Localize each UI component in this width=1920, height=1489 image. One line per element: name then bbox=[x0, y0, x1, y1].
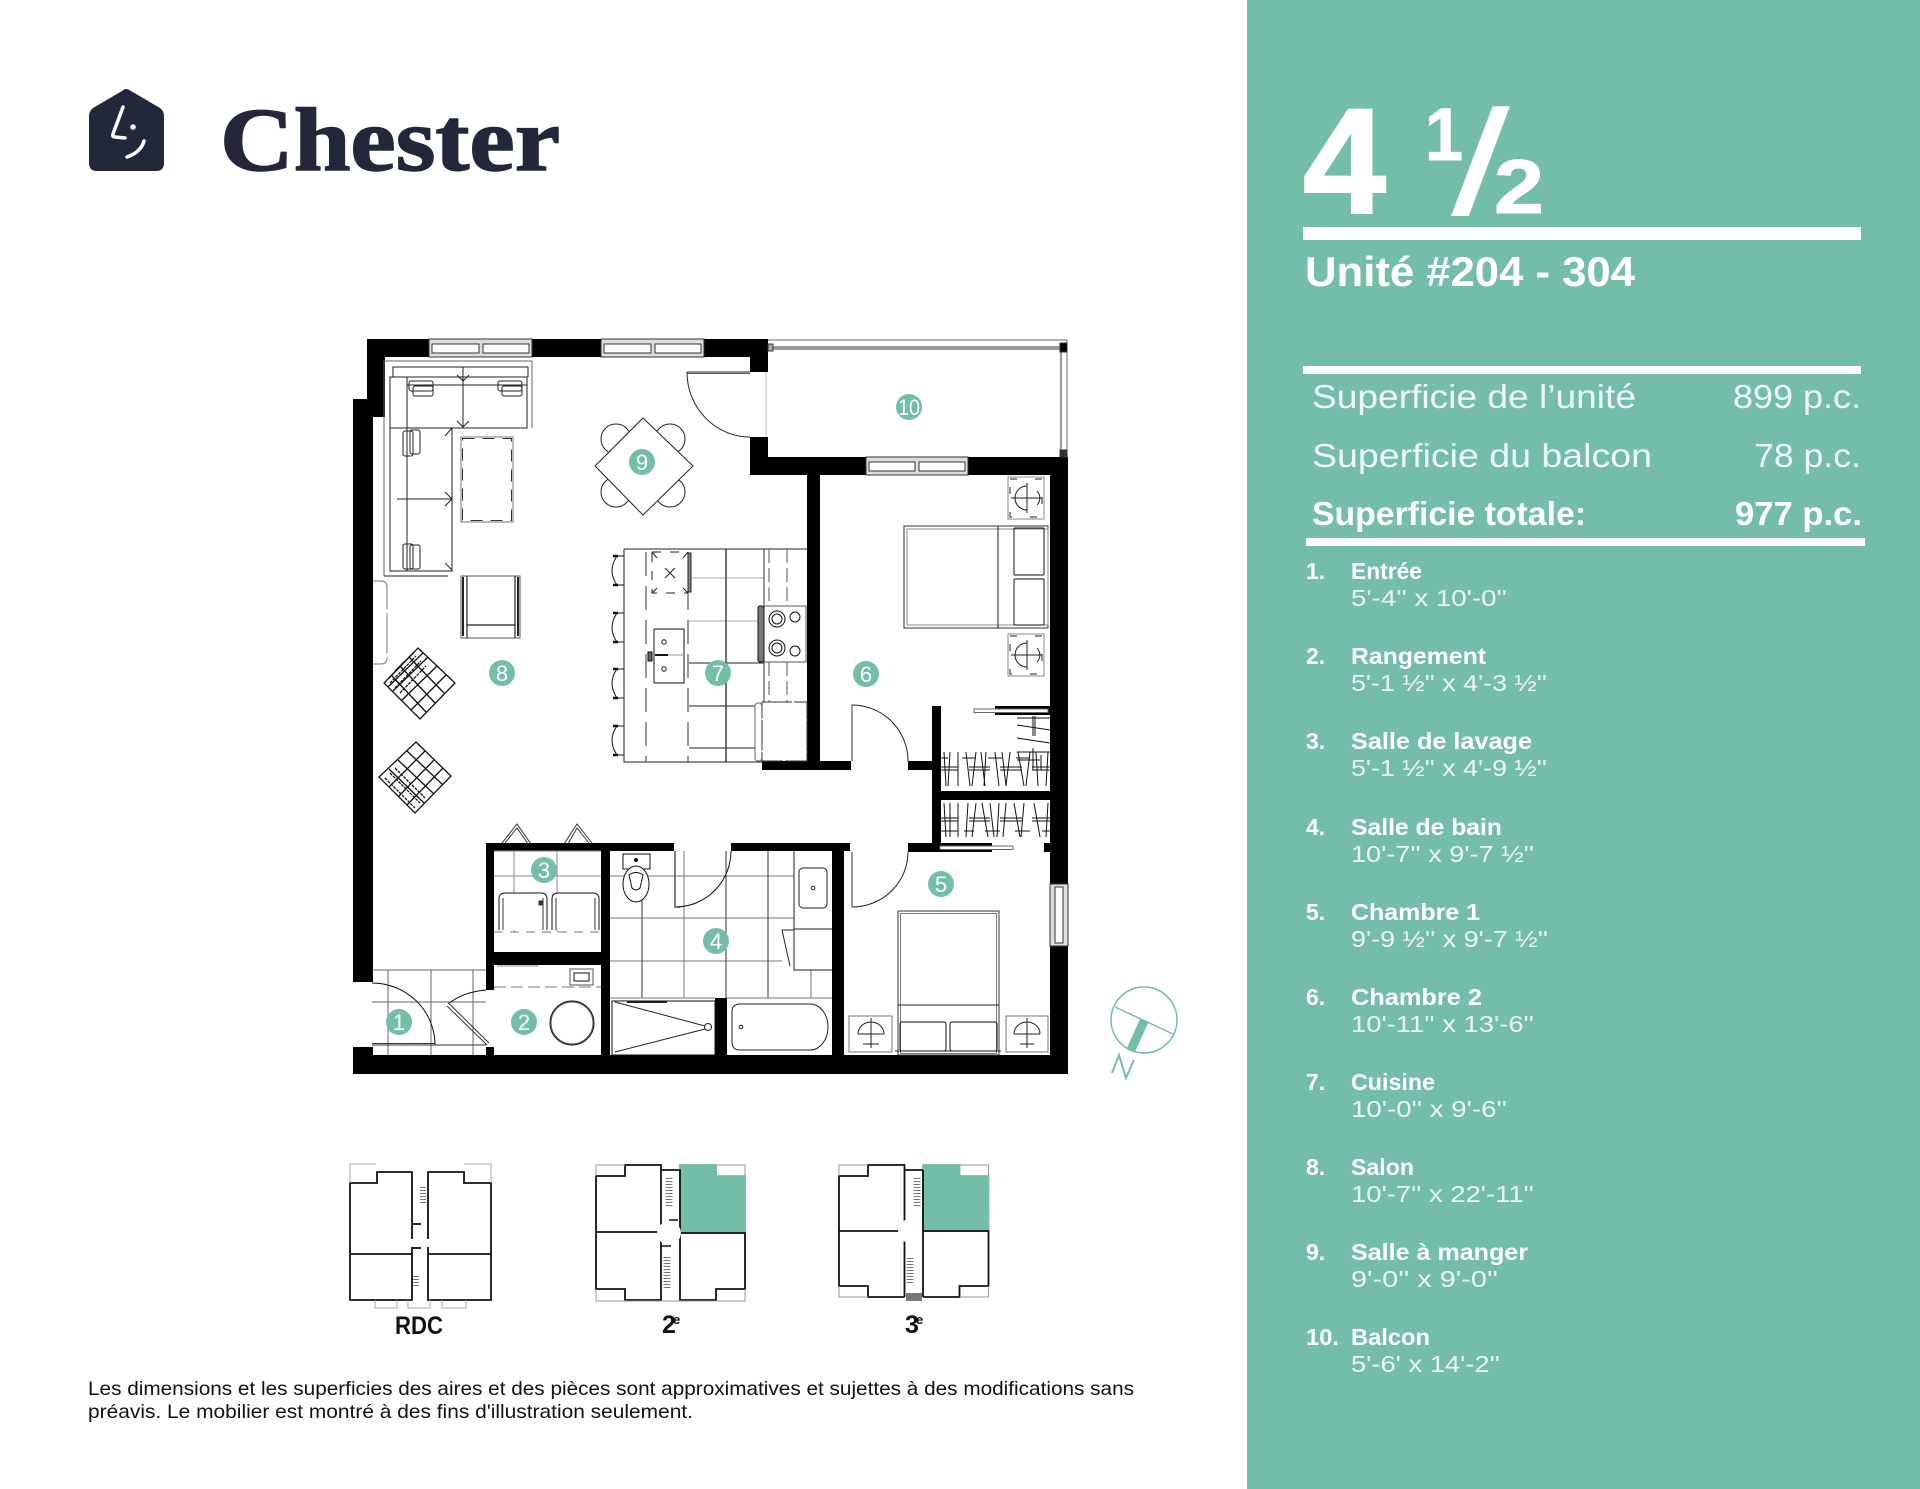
room list: 4. bbox=[1306, 814, 1325, 840]
coffee table bbox=[461, 437, 513, 522]
armchair bbox=[461, 576, 520, 638]
heading: 4 1/2: 4 bbox=[1303, 77, 1386, 245]
lounge chair 2 bbox=[379, 742, 451, 813]
room number markers: 1 bbox=[393, 1010, 405, 1035]
heading: 4 1/2: 1 bbox=[1425, 93, 1463, 176]
logo: house icon bbox=[89, 89, 164, 171]
mini plan labels: RDC bbox=[395, 1312, 443, 1340]
area table: Superficie du balcon bbox=[1312, 437, 1652, 474]
panel: right sidebar bbox=[1247, 0, 1920, 1489]
room list: 5'-6' x 14'-2'' bbox=[1351, 1351, 1500, 1377]
room list: 2. bbox=[1306, 643, 1325, 669]
mini plan: RDC bbox=[350, 1164, 491, 1308]
room list: 5'-4'' x 10'-0'' bbox=[1351, 585, 1507, 611]
mini plan labels: 2 bbox=[662, 1311, 676, 1339]
room list: 9'-0'' x 9'-0'' bbox=[1351, 1266, 1498, 1292]
shower bbox=[612, 1001, 715, 1055]
room list: 10. bbox=[1306, 1324, 1339, 1350]
room list: 7. bbox=[1306, 1069, 1325, 1095]
mini plan labels bbox=[395, 1311, 923, 1340]
balcony door bbox=[687, 372, 766, 437]
bedroom 2 furniture bbox=[904, 477, 1048, 676]
area table: Superficie de l’unité bbox=[1312, 378, 1636, 415]
logo: wordmark Chester: Chester bbox=[220, 91, 560, 190]
room number markers: 9 bbox=[636, 450, 648, 475]
room list: 3. bbox=[1306, 728, 1325, 754]
room list: 10'-11'' x 13'-6'' bbox=[1351, 1011, 1534, 1037]
radiator bbox=[373, 581, 387, 664]
room number markers: 5 bbox=[935, 872, 947, 897]
dishwasher bbox=[652, 552, 691, 593]
mini plan: 3e bbox=[839, 1165, 988, 1301]
mini plan labels: e bbox=[673, 1312, 680, 1327]
room list: 10'-7'' x 22'-11'' bbox=[1351, 1181, 1534, 1207]
kitchen sink bbox=[648, 629, 684, 683]
room list: Chambre 2 bbox=[1351, 984, 1482, 1010]
room list bbox=[1306, 558, 1548, 1377]
room list: 1. bbox=[1306, 558, 1325, 584]
unit number: Unité #204 - 304 bbox=[1305, 248, 1636, 295]
balcony rail bbox=[768, 340, 1067, 457]
area table: 78 p.c. bbox=[1754, 437, 1861, 474]
toilet bbox=[623, 854, 650, 902]
room list: 6. bbox=[1306, 984, 1325, 1010]
room list: Salle de bain bbox=[1351, 814, 1502, 840]
room list: Rangement bbox=[1351, 643, 1486, 669]
room list: Cuisine bbox=[1351, 1069, 1435, 1095]
room list: 5'-1 ½'' x 4'-9 ½'' bbox=[1351, 755, 1547, 781]
mini plan: 2e bbox=[596, 1165, 745, 1301]
bedroom 1 furniture bbox=[849, 911, 1048, 1055]
dining table bbox=[595, 418, 693, 515]
room list: 10'-0'' x 9'-6'' bbox=[1351, 1096, 1507, 1122]
room list: Chambre 1 bbox=[1351, 899, 1480, 925]
room list: Salle de lavage bbox=[1351, 728, 1532, 754]
room list: 5'-1 ½'' x 4'-3 ½'' bbox=[1351, 670, 1547, 696]
icon: north compass bbox=[1111, 987, 1177, 1078]
room list: 9'-9 ½'' x 9'-7 ½'' bbox=[1351, 926, 1548, 952]
vanity bbox=[782, 851, 832, 970]
mini plan labels: 3 bbox=[905, 1311, 919, 1339]
stove bbox=[758, 606, 806, 662]
room list: 10'-7'' x 9'-7 ½'' bbox=[1351, 841, 1534, 867]
lounge chair 1 bbox=[384, 648, 455, 719]
room number markers: 6 bbox=[860, 662, 872, 687]
bathtub bbox=[732, 1004, 828, 1050]
kitchen bbox=[624, 549, 807, 762]
room number markers: 8 bbox=[496, 661, 508, 686]
room number markers bbox=[386, 394, 954, 1035]
room number markers: 3 bbox=[538, 858, 550, 883]
walls bbox=[353, 339, 1068, 1074]
room list: Salon bbox=[1351, 1154, 1414, 1180]
windows bbox=[429, 339, 1068, 946]
room number markers: 2 bbox=[518, 1010, 530, 1035]
room list: 8. bbox=[1306, 1154, 1325, 1180]
room list: Balcon bbox=[1351, 1324, 1430, 1350]
heading: 4 1/2 bbox=[1303, 77, 1544, 246]
bar stools bbox=[612, 556, 624, 755]
refrigerator bbox=[755, 702, 807, 761]
heading: 4 1/2: 2 bbox=[1494, 145, 1544, 230]
area table: 899 p.c. bbox=[1733, 378, 1861, 415]
heading: 4 1/2: / bbox=[1452, 81, 1510, 246]
mini plan labels: e bbox=[916, 1312, 923, 1327]
room list: 5. bbox=[1306, 899, 1325, 925]
area table: Superficie totale: bbox=[1312, 495, 1586, 532]
room number markers: 4 bbox=[710, 929, 722, 954]
storage room bbox=[494, 966, 601, 1045]
laundry bbox=[494, 824, 601, 932]
closet hangers bbox=[940, 709, 1050, 850]
room number markers: 10 bbox=[898, 395, 920, 420]
footnote: Les dimensions et les superficies des aires et des pièces sont approximatives et sujettes à des modifications sans bbox=[88, 1378, 1134, 1400]
room list: 9. bbox=[1306, 1239, 1325, 1265]
room number markers: 7 bbox=[712, 661, 724, 686]
footnote bbox=[88, 1378, 1134, 1423]
bathroom bbox=[610, 851, 832, 998]
area table bbox=[1312, 378, 1862, 532]
bedroom doors bbox=[852, 705, 908, 907]
floor plan bbox=[353, 339, 1068, 1074]
entry bbox=[372, 970, 489, 1055]
sofa bbox=[384, 361, 532, 576]
area table: 977 p.c. bbox=[1735, 495, 1862, 532]
room list: Entrée bbox=[1351, 558, 1422, 584]
room list: Salle à manger bbox=[1351, 1239, 1528, 1265]
footnote: préavis. Le mobilier est montré à des fins d'illustration seulement. bbox=[88, 1401, 693, 1423]
